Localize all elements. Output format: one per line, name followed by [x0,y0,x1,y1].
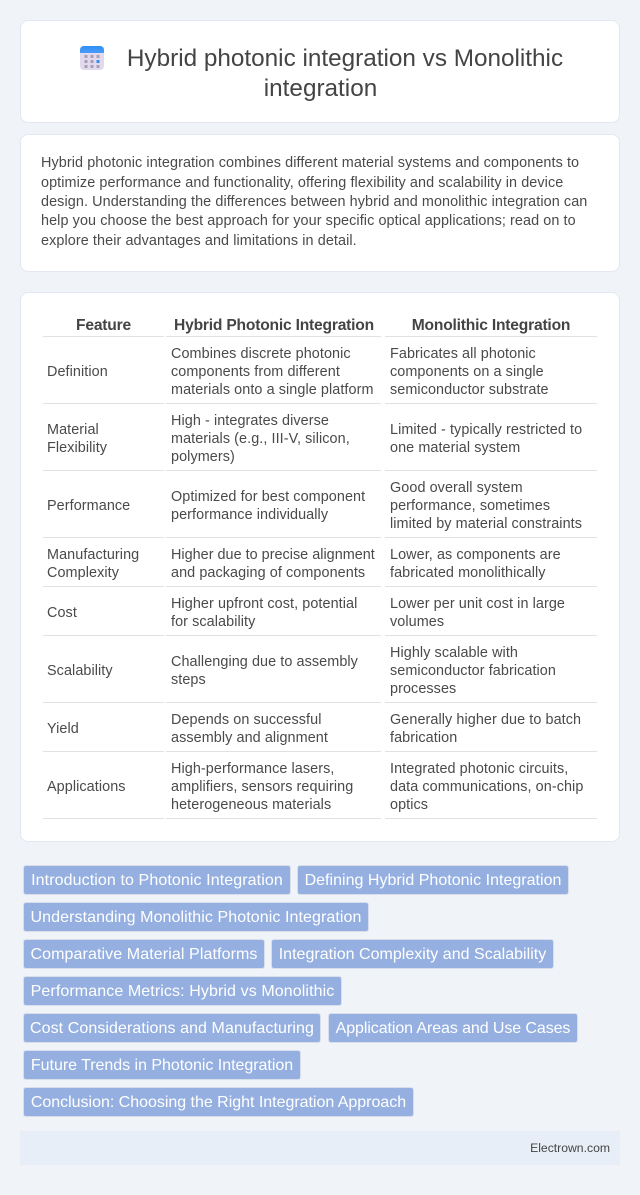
text: polymers) [171,449,235,465]
text: semiconductor substrate [390,382,549,398]
text: Depends on successful [171,712,321,728]
text: processes [390,681,456,697]
footer [20,1131,620,1165]
text: for scalability [171,614,255,630]
text: Optimized for best component [171,489,365,505]
text: Lower, as components are [390,547,561,563]
intro text: explore their advantages and limitations in detail. [41,233,357,249]
text: Yield [47,721,79,737]
text: High-performance lasers, [171,761,334,777]
row: material flexibility [47,413,582,465]
row: definition [47,346,549,398]
text: Comparative Material Platforms [30,946,258,963]
icon: calendar [80,46,104,70]
tags [23,865,578,1117]
text: Defining Hybrid Photonic Integration [305,872,561,889]
text: Combines discrete photonic [171,346,351,362]
text: Higher due to precise alignment [171,547,375,563]
text: Higher upfront cost, potential [171,596,357,612]
text: Cost Considerations and Manufacturing [30,1020,314,1037]
text: Performance Metrics: Hybrid vs Monolithic [31,983,334,1000]
row: manufacturing complexity [47,547,561,581]
text: Challenging due to assembly [171,654,358,670]
text: Understanding Monolithic Photonic Integration [31,909,361,926]
text: fabricated monolithically [390,565,546,581]
row: scalability [47,645,556,697]
title: Hybrid photonic integration vs Monolithic [127,45,563,72]
row: cost [47,596,565,630]
header card [20,20,620,123]
text: limited by material constraints [390,516,582,532]
text: Introduction to Photonic Integration [31,872,283,889]
intro text [41,155,587,249]
row: yield [47,712,581,746]
text: Limited - typically restricted to [390,422,582,438]
intro text: optimize performance and functionality, offering flexibility and scalability in device [41,175,563,191]
text: and packaging of components [171,565,365,581]
text: Cost [47,605,77,621]
text: High - integrates diverse [171,413,329,429]
row rules [43,336,597,819]
row: applications [47,761,583,813]
text: Complexity [47,565,119,581]
text: components on a single [390,364,544,380]
intro text: help you choose the best approach for your specific optical applications; read on to [41,213,576,229]
text: materials (e.g., III-V, silicon, [171,431,350,447]
text: Highly scalable with [390,645,518,661]
text: Manufacturing [47,547,139,563]
text: components from different [171,364,340,380]
footer: Electrown.com [530,1141,610,1155]
text: Monolithic Integration [412,317,570,334]
text: Applications [47,779,126,795]
text: Performance [47,498,130,514]
text: volumes [390,614,444,630]
text: Conclusion: Choosing the Right Integration Approach [31,1094,406,1111]
text: steps [171,672,206,688]
text: Feature [76,317,131,334]
text: Material [47,422,99,438]
text: Generally higher due to batch [390,712,581,728]
text: performance individually [171,507,328,523]
table header [76,317,570,334]
text: Integrated photonic circuits, [390,761,568,777]
text: Integration Complexity and Scalability [279,946,546,963]
text: one material system [390,440,520,456]
text: materials onto a single platform [171,382,374,398]
text: heterogeneous materials [171,797,331,813]
text: Application Areas and Use Cases [336,1020,570,1037]
text: fabrication [390,730,457,746]
panel: comparison table [20,292,620,842]
text: Fabricates all photonic [390,346,536,362]
text: Flexibility [47,440,107,456]
text: data communications, on-chip [390,779,583,795]
row: performance [47,480,582,532]
intro text: design. Understanding the differences between hybrid and monolithic integration can [41,194,587,210]
text: Definition [47,364,108,380]
text: Future Trends in Photonic Integration [31,1057,293,1074]
panel: introduction [20,134,620,272]
text: Lower per unit cost in large [390,596,565,612]
text: performance, sometimes [390,498,550,514]
intro text: Hybrid photonic integration combines different material systems and components to [41,155,579,171]
text: assembly and alignment [171,730,328,746]
title [127,45,563,102]
text: optics [390,797,428,813]
text: amplifiers, sensors requiring [171,779,353,795]
title: integration [264,75,377,102]
text: Good overall system [390,480,523,496]
text: Hybrid Photonic Integration [174,317,374,334]
text: semiconductor fabrication [390,663,556,679]
text: Scalability [47,663,113,679]
